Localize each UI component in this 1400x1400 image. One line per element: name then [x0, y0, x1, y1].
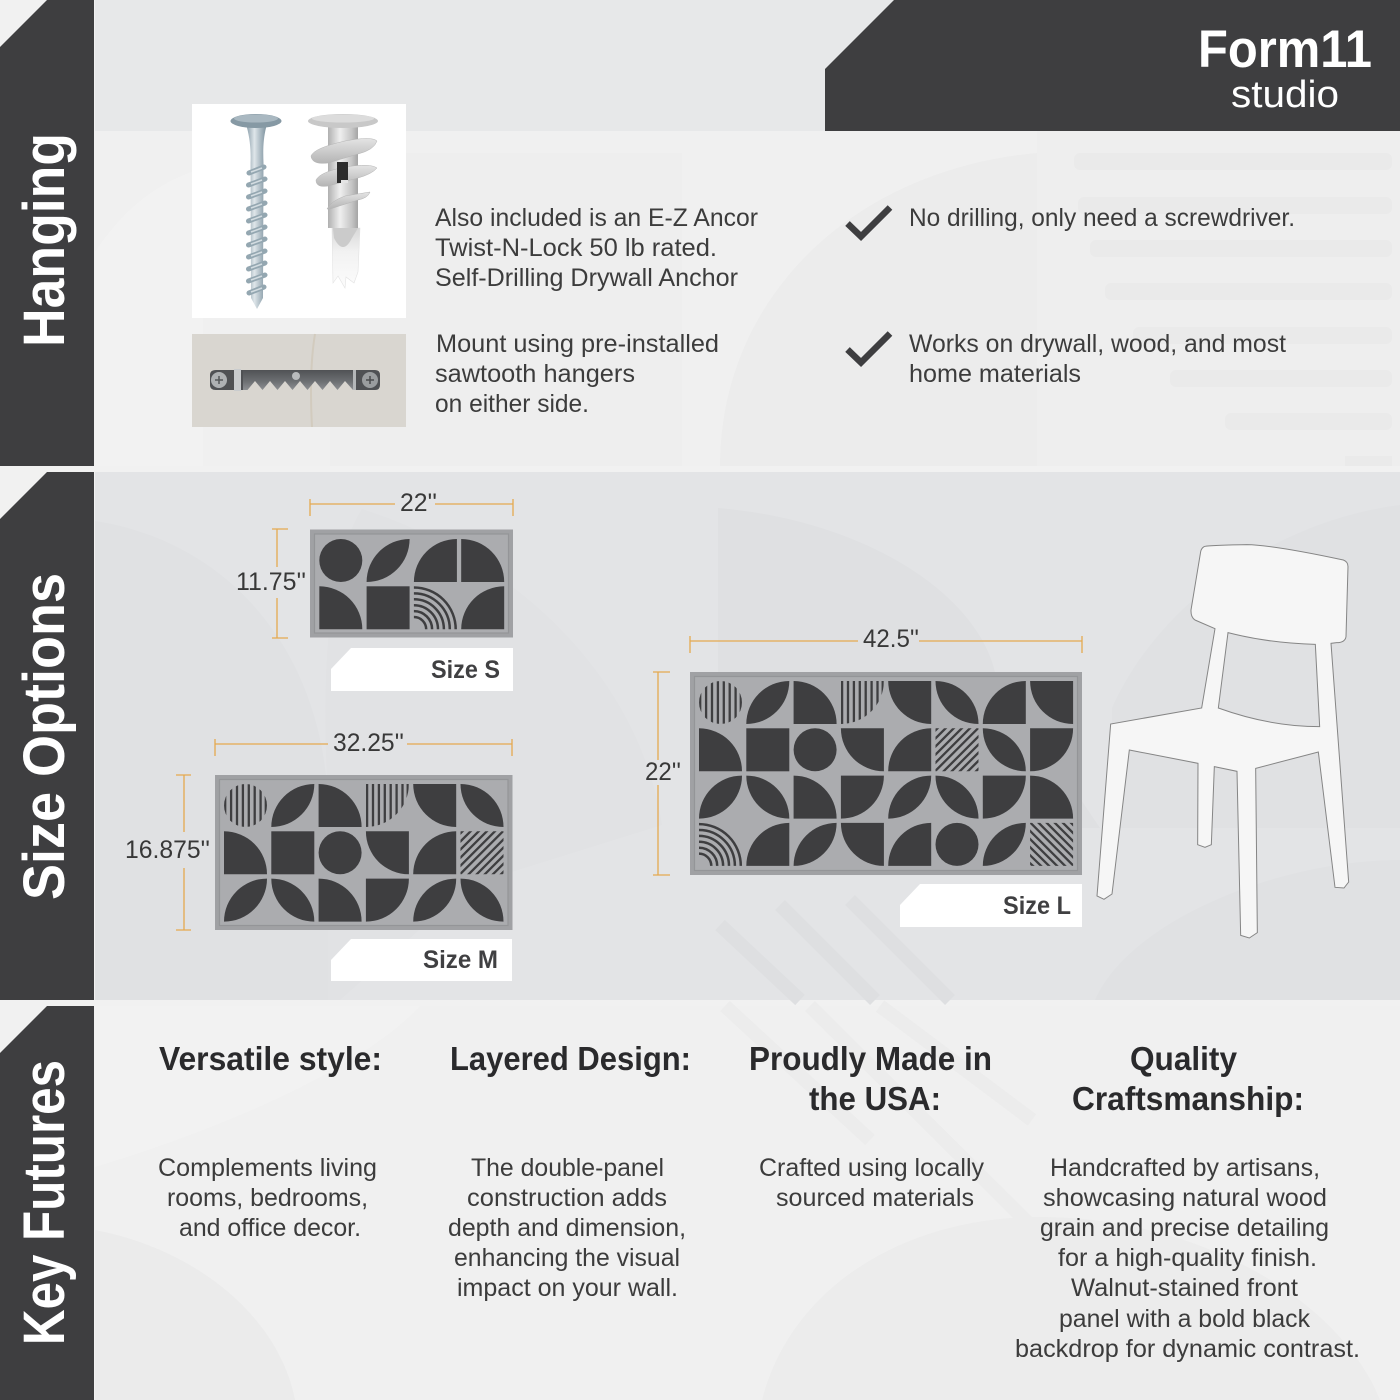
- feature: Layered Design: [448, 1040, 691, 1302]
- sidebar label: Key Futures: Key Futures: [12, 1060, 77, 1345]
- artwork: size M panel: [215, 775, 512, 930]
- feature: Versatile style: rooms, bedrooms,: [167, 1184, 368, 1212]
- benefit: works on materials: home materials: [909, 360, 1081, 388]
- logo wordmark: Form11: [1198, 20, 1372, 79]
- feature: Layered Design: enhancing the visual: [454, 1244, 680, 1272]
- text: hanger description: sawtooth hangers: [435, 360, 635, 388]
- feature: Quality Craftsmanship: Quality: [1130, 1040, 1238, 1077]
- benefit: works on materials: [909, 330, 1286, 388]
- size M dimensions: [125, 729, 512, 930]
- feature: Proudly Made in the USA: Crafted using locally: [759, 1154, 984, 1182]
- sidebar label: Size Options: Size Options: [12, 573, 77, 900]
- text: hanger description: Mount using pre-installed: [436, 330, 719, 358]
- artwork: size S panel: [310, 530, 513, 638]
- label: Size M: [331, 939, 512, 981]
- feature: Quality Craftsmanship: Walnut-stained front: [1071, 1274, 1298, 1302]
- sidebar: Size Options: [0, 472, 94, 1000]
- text: anchor description: Self-Drilling Drywall Anchor: [435, 264, 738, 292]
- icon: check mark 2: [848, 334, 890, 362]
- label: Size S: [331, 648, 513, 691]
- size M dimensions: 16.875'': [125, 836, 210, 864]
- feature: Quality Craftsmanship: [1015, 1040, 1360, 1363]
- feature: Versatile style: and office decor.: [179, 1214, 361, 1242]
- label: Size L: [900, 884, 1082, 927]
- photo: screw and drywall anchor: [192, 104, 406, 318]
- feature: Layered Design: The double-panel: [471, 1154, 664, 1182]
- icon: screw: [230, 114, 282, 309]
- label: Size S: Size S: [431, 656, 500, 684]
- feature: Quality Craftsmanship: panel with a bold black: [1059, 1305, 1310, 1333]
- sidebar: Key Futures: [0, 1006, 94, 1400]
- illustration: chair outline: [1097, 545, 1349, 938]
- artwork: size L panel: [690, 672, 1082, 875]
- feature: Versatile style: Versatile style:: [159, 1040, 382, 1077]
- feature: Layered Design: Layered Design:: [450, 1040, 691, 1077]
- feature: Quality Craftsmanship: Craftsmanship:: [1072, 1080, 1304, 1117]
- feature: Quality Craftsmanship: showcasing natural wood: [1043, 1184, 1327, 1212]
- feature: Quality Craftsmanship: Handcrafted by artisans,: [1050, 1154, 1320, 1182]
- feature: Quality Craftsmanship: backdrop for dynamic contrast.: [1015, 1335, 1360, 1363]
- label: Size L: Size L: [1003, 892, 1071, 920]
- feature: Layered Design: construction adds: [467, 1184, 667, 1212]
- text: anchor description: Also included is an E-Z Ancor: [435, 204, 758, 232]
- feature: Proudly Made in the USA: [749, 1040, 992, 1212]
- photo: sawtooth hanger on wood: [192, 334, 406, 427]
- sidebar label: Hanging: Hanging: [12, 133, 77, 347]
- size L dimensions: 42.5'': [863, 625, 919, 653]
- logo header panel: [825, 0, 1400, 131]
- feature: Proudly Made in the USA: the USA:: [809, 1080, 941, 1117]
- feature: Quality Craftsmanship: for a high-quality finish.: [1058, 1244, 1317, 1272]
- size M dimensions: 32.25'': [333, 729, 404, 757]
- benefit: no drilling: No drilling, only need a screwdriver.: [909, 204, 1295, 232]
- feature: Layered Design: impact on your wall.: [457, 1274, 678, 1302]
- size S dimensions: [236, 489, 513, 638]
- icon: drywall anchor: [308, 114, 378, 288]
- size L dimensions: [645, 625, 1082, 875]
- benefit: works on materials: Works on drywall, wood, and most: [909, 330, 1286, 358]
- feature: Proudly Made in the USA: sourced materials: [776, 1184, 974, 1212]
- feature: Versatile style: Complements living: [158, 1154, 377, 1182]
- label: Size M: Size M: [423, 946, 498, 974]
- size L dimensions: 22'': [645, 758, 681, 786]
- text: hanger description: [435, 330, 719, 418]
- sidebar: Hanging: [0, 0, 94, 466]
- size S dimensions: 22'': [400, 489, 437, 517]
- feature: Proudly Made in the USA: Proudly Made in: [749, 1040, 992, 1077]
- size S dimensions: 11.75'': [236, 568, 306, 596]
- text: anchor description: Twist-N-Lock 50 lb rated.: [435, 234, 717, 262]
- feature: Layered Design: depth and dimension,: [448, 1214, 686, 1242]
- feature: Quality Craftsmanship: grain and precise detailing: [1040, 1214, 1329, 1242]
- text: anchor description: [435, 204, 758, 292]
- icon: check mark 1: [848, 208, 890, 236]
- text: hanger description: on either side.: [435, 390, 589, 418]
- logo subtitle: studio: [1231, 74, 1339, 116]
- feature: Versatile style: [158, 1040, 382, 1242]
